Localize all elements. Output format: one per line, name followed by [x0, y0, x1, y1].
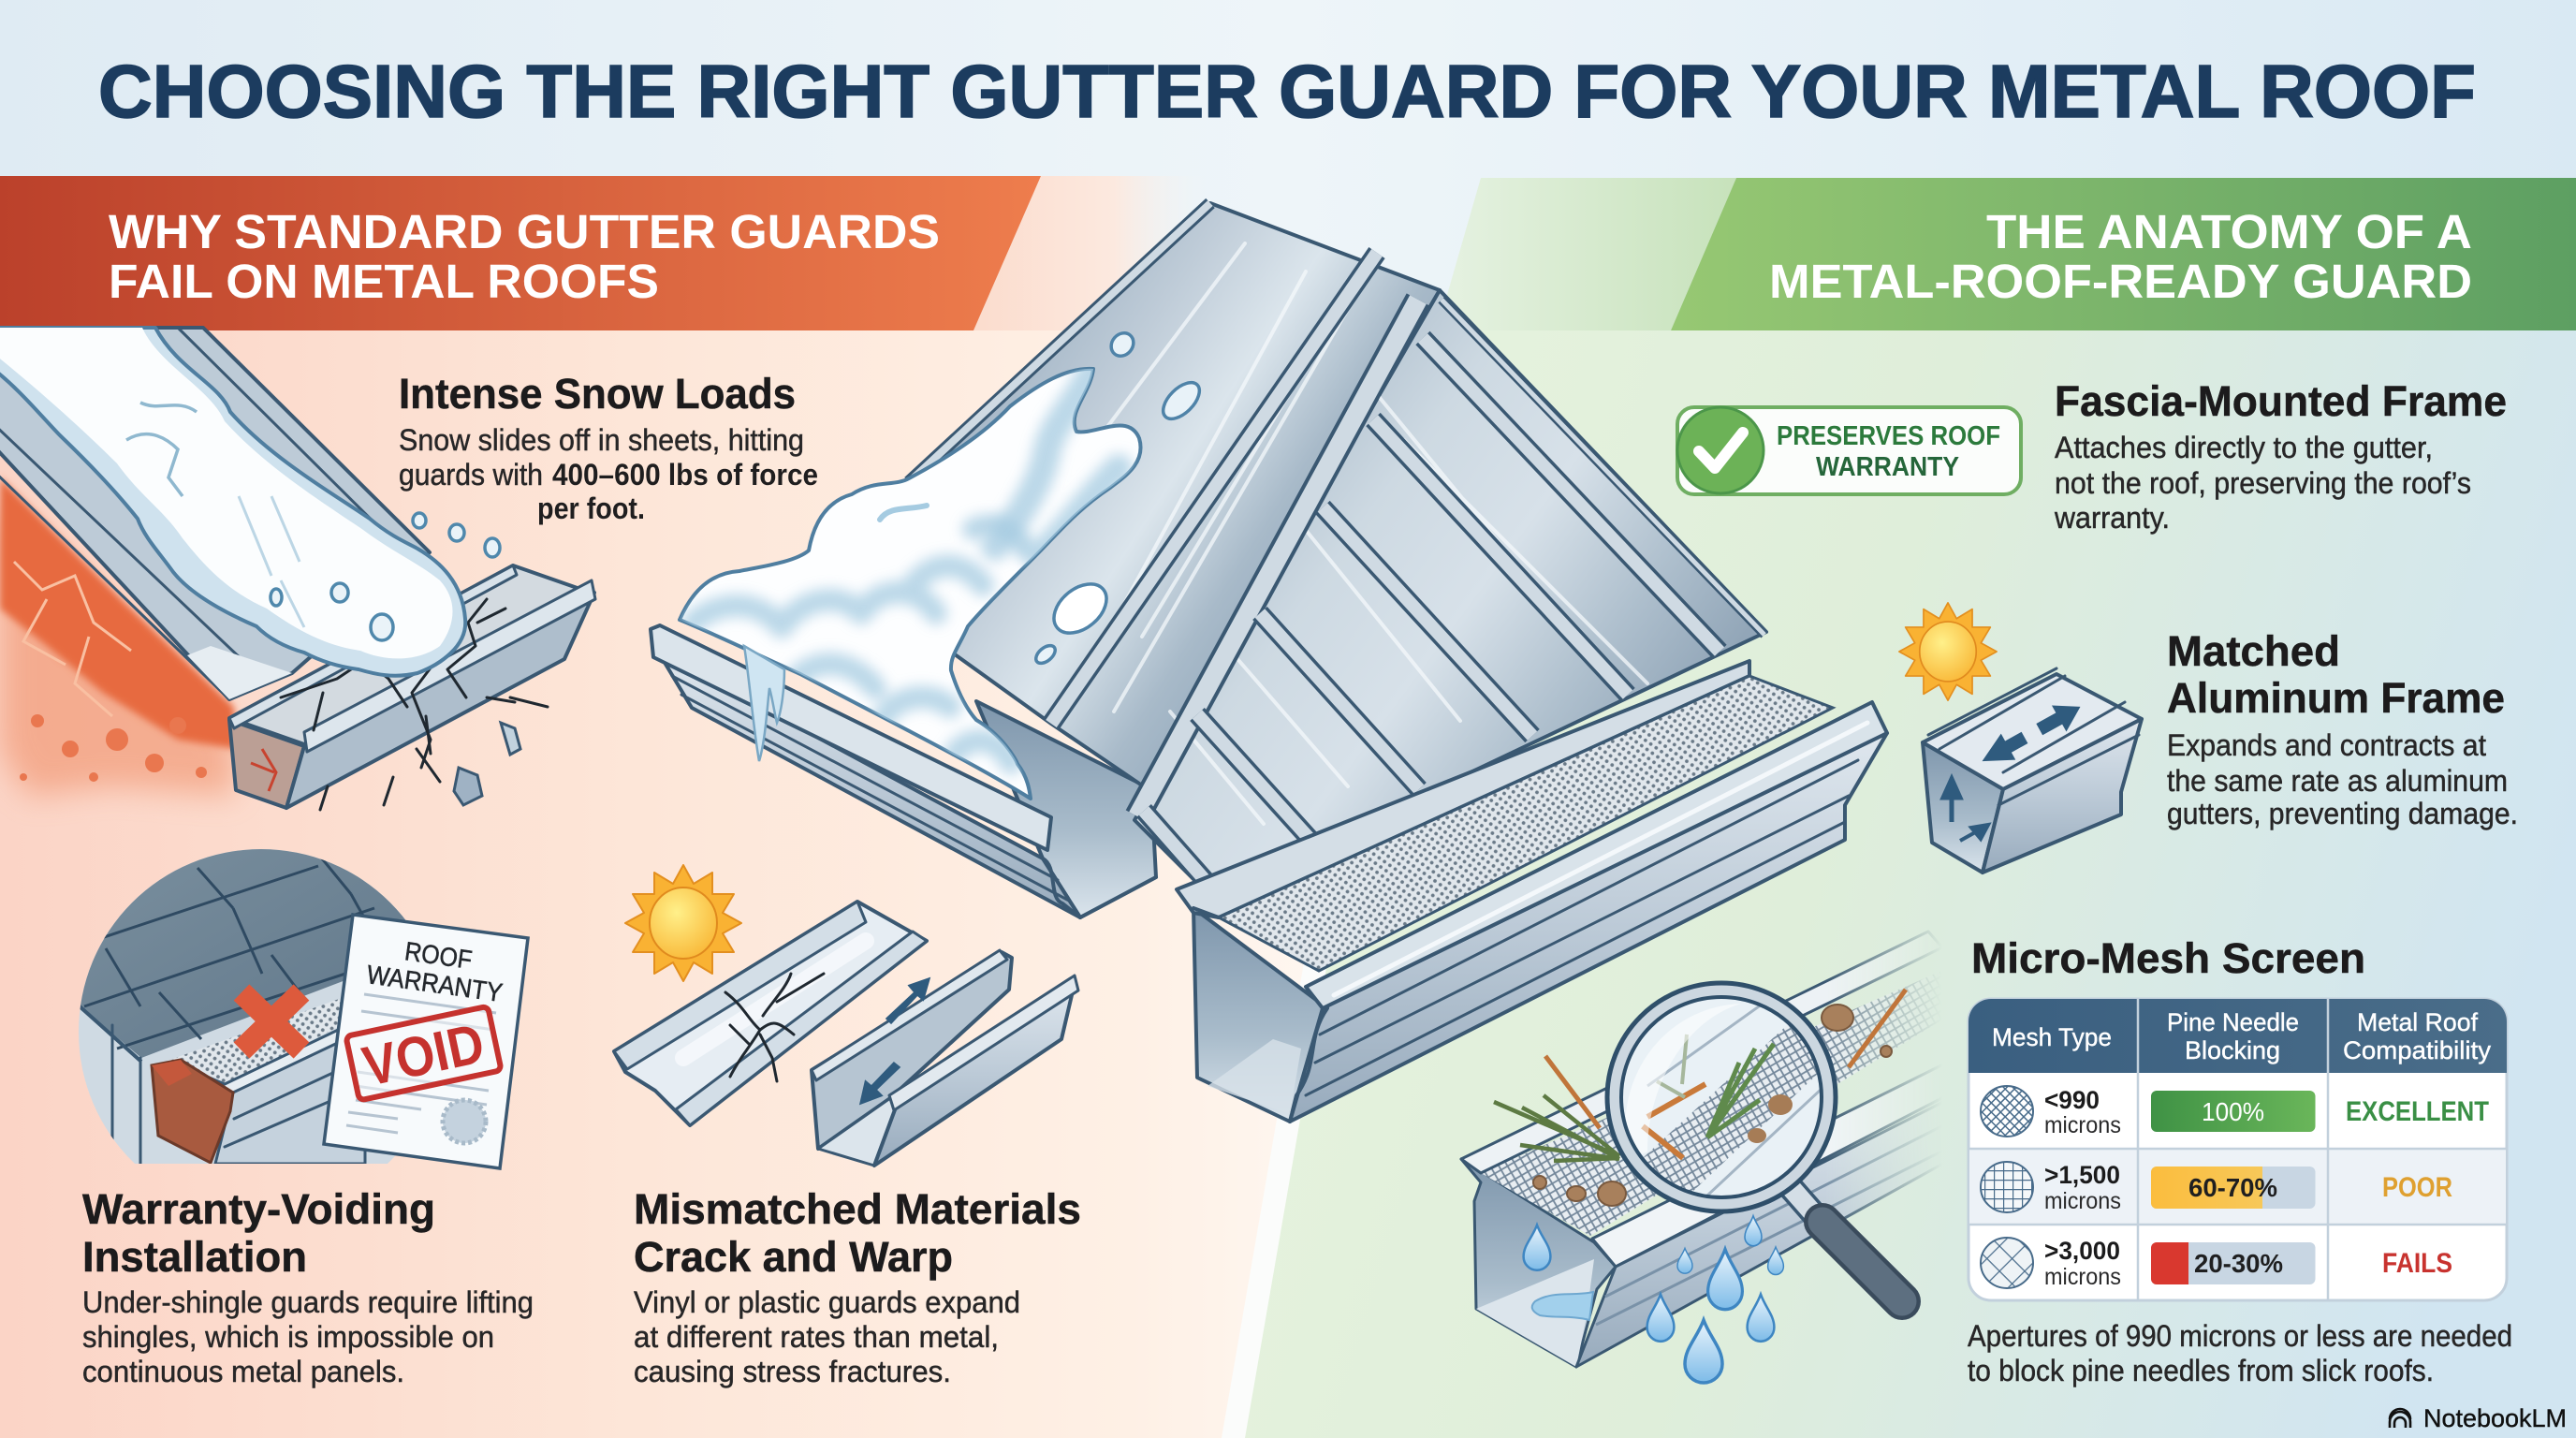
- text: matched aluminum frame: [2167, 627, 2518, 830]
- warranty document: [324, 915, 528, 1168]
- table header: [1969, 999, 2507, 1073]
- badge: preserves roof warranty: WARRANTY: [1816, 452, 1959, 482]
- table caption: to block pine needles from slick roofs.: [1968, 1354, 2434, 1387]
- standing seams plane A: [909, 203, 1418, 816]
- icon: check circle: [1677, 407, 1764, 493]
- roof plane B: [1134, 290, 1766, 896]
- red X: [242, 992, 301, 1050]
- text: fascia-mounted frame: [2054, 377, 2507, 535]
- left gutter with snow: [651, 625, 1156, 917]
- standing seams plane B: [1144, 300, 1764, 889]
- row: over 1,500 microns: microns: [2044, 1188, 2121, 1214]
- center white band: [1123, 330, 1498, 1438]
- orange impact splatter: [0, 477, 236, 796]
- text: intense snow loads: per foot.: [537, 492, 645, 525]
- roof plane A: [909, 203, 1440, 789]
- sliding snow sheet: [0, 328, 465, 676]
- text: intense snow loads: [399, 370, 818, 525]
- heading: micro-mesh screen: Micro-Mesh Screen: [1971, 934, 2365, 982]
- table header: Compatibility: [2343, 1036, 2491, 1064]
- warranty document: WARRANTY: [365, 960, 505, 1007]
- snow pile on left gutter: [680, 369, 1141, 799]
- text: intense snow loads: Intense Snow Loads: [399, 370, 796, 418]
- text: matched aluminum frame: the same rate as aluminum: [2167, 764, 2508, 798]
- icon: small sun: [1899, 603, 1997, 700]
- badge: preserves roof warranty: PRESERVES ROOF: [1777, 421, 2000, 451]
- row: over 3,000 microns: >3,000: [2044, 1237, 2120, 1265]
- table caption: [1968, 1319, 2512, 1387]
- broken gutter: [229, 565, 595, 810]
- illustration: micro-mesh gutter with magnifier: [1461, 932, 1956, 1383]
- water drops: [1524, 1216, 1783, 1383]
- row: over 3,000 microns: microns: [2044, 1264, 2121, 1290]
- house shingles and gutter in circle: [79, 849, 406, 1164]
- water puddle: [1532, 1292, 1593, 1320]
- row: under 990 microns: [1981, 1086, 2489, 1138]
- text: fascia-mounted frame: Attaches directly to the gutter,: [2055, 431, 2433, 464]
- left header banner: WHY STANDARD GUTTER GUARDS: [109, 205, 940, 258]
- row: under 990 microns: 100%: [2202, 1097, 2264, 1126]
- text: fascia-mounted frame: not the roof, preserving the roof’s: [2055, 466, 2471, 500]
- table header: Metal Roof: [2357, 1008, 2478, 1036]
- text: fascia-mounted frame: Fascia-Mounted Frame: [2055, 377, 2507, 425]
- text: mismatched materials: [634, 1185, 1081, 1388]
- sliding roof panel: [0, 328, 430, 699]
- text: mismatched materials: at different rates than metal,: [634, 1320, 999, 1354]
- text: intense snow loads: 400–600 lbs of force: [552, 458, 818, 492]
- text: matched aluminum frame: Expands and contracts at: [2167, 728, 2486, 762]
- cracked vinyl gutter: [614, 902, 927, 1125]
- icon: sun: [625, 865, 741, 981]
- text: warranty-voiding installation: shingles, which is impossible on: [82, 1320, 494, 1354]
- title: CHOOSING THE RIGHT GUTTER GUARD FOR YOUR METAL ROOF: [98, 50, 2476, 133]
- row: over 1,500 microns: 60-70%: [2188, 1173, 2277, 1202]
- mesh comparison table: [1969, 999, 2507, 1300]
- text: warranty-voiding installation: [82, 1185, 534, 1388]
- right gutter with mesh: [1177, 661, 1887, 1122]
- illustration: matched aluminum frame: [1923, 668, 2142, 873]
- text: intense snow loads: guards with: [399, 458, 543, 492]
- left header banner: [0, 176, 1208, 330]
- NotebookLM logo: NotebookLM: [2423, 1404, 2567, 1432]
- text: intense snow loads: Snow slides off in sheets, hitting: [399, 423, 804, 457]
- row: over 3,000 microns: 20-30%: [2194, 1249, 2283, 1278]
- water beads on roof: [1032, 329, 1206, 667]
- row: over 3,000 microns: [1981, 1237, 2452, 1290]
- text: matched aluminum frame: gutters, preventing damage.: [2167, 797, 2518, 830]
- text: warranty-voiding installation: continuous metal panels.: [82, 1355, 404, 1388]
- row: over 1,500 microns: POOR: [2382, 1172, 2452, 1203]
- right header banner: METAL-ROOF-READY GUARD: [1769, 255, 2472, 308]
- row: under 990 microns: EXCELLENT: [2346, 1096, 2489, 1127]
- panel: right background: [1245, 330, 2576, 1438]
- text: mismatched materials: Vinyl or plastic guards expand: [634, 1285, 1020, 1319]
- badge: preserves roof warranty: [1677, 407, 2021, 494]
- table caption: Apertures of 990 microns or less are needed: [1968, 1319, 2512, 1353]
- illustration: main roof with two gutters: [651, 203, 1887, 1122]
- illustration: snow hitting broken gutter: [0, 328, 595, 810]
- text: warranty-voiding installation: Warranty-Voiding: [82, 1185, 435, 1233]
- row: over 3,000 microns: FAILS: [2382, 1248, 2452, 1279]
- left header banner: FAIL ON METAL ROOFS: [109, 255, 659, 308]
- magnifier handle: [1788, 1184, 1902, 1301]
- straight metal gutter: [812, 950, 1078, 1166]
- row: over 1,500 microns: [1981, 1161, 2452, 1214]
- debris and needles: [1494, 990, 1906, 1206]
- text: mismatched materials: Crack and Warp: [634, 1233, 953, 1281]
- row: under 990 microns: <990: [2044, 1086, 2100, 1114]
- table header: Mesh Type: [1992, 1023, 2112, 1051]
- warranty document: VOID: [358, 1011, 490, 1098]
- gutter body: [1461, 932, 1956, 1367]
- magnifier lens: [1607, 983, 1836, 1211]
- text: matched aluminum frame: Matched: [2167, 627, 2340, 675]
- text: fascia-mounted frame: warranty.: [2054, 501, 2170, 535]
- text: warranty-voiding installation: Under-shingle guards require lifting: [82, 1285, 534, 1319]
- text: mismatched materials: Mismatched Materials: [634, 1185, 1081, 1233]
- flying snow rings: [271, 513, 500, 640]
- right header banner: [1437, 178, 2576, 330]
- illustration: warranty voided house edge: [75, 833, 528, 1170]
- illustration: mismatched materials: [614, 865, 1078, 1166]
- table header: Blocking: [2185, 1036, 2280, 1064]
- row: under 990 microns: microns: [2044, 1112, 2121, 1138]
- streaks on roof: [1086, 243, 1647, 824]
- table header: Pine Needle: [2167, 1008, 2299, 1036]
- text: matched aluminum frame: Aluminum Frame: [2167, 674, 2505, 722]
- text: warranty-voiding installation: Installation: [82, 1233, 307, 1281]
- icicles: [744, 646, 784, 761]
- row: over 1,500 microns: >1,500: [2044, 1161, 2120, 1189]
- text: mismatched materials: causing stress fractures.: [634, 1355, 951, 1388]
- right header banner: THE ANATOMY OF A: [1986, 205, 2472, 258]
- panel: left background: [0, 330, 1413, 1438]
- warranty document: ROOF: [403, 936, 474, 975]
